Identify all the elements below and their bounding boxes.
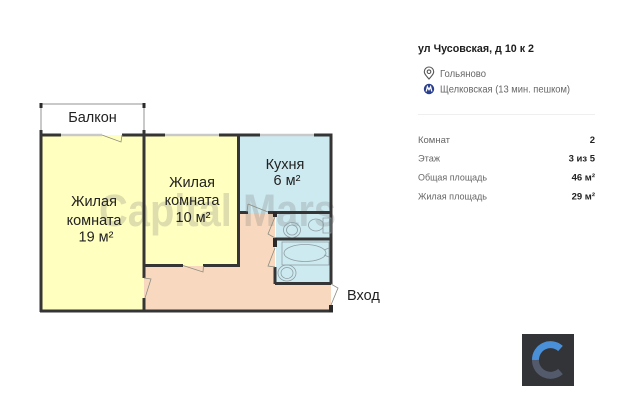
- logo: [522, 334, 574, 386]
- label: balcony: Балкон: [68, 110, 117, 126]
- label: kitchen: Кухня: [266, 157, 304, 173]
- label: entrance: Вход: [347, 288, 380, 304]
- windows: [61, 134, 314, 136]
- room: small living room: [144, 135, 239, 266]
- doors: [102, 135, 338, 305]
- district: Гольяново: [440, 69, 486, 80]
- stats table: 3 из 5: [569, 154, 596, 164]
- label: room 19: комната: [67, 213, 122, 229]
- room: large living room: [41, 135, 144, 310]
- icon: location pin: [424, 67, 434, 79]
- stats table: Жилая площадь: [418, 192, 487, 202]
- address heading: ул Чусовская, д 10 к 2: [418, 43, 534, 55]
- label: room 10: Жилая: [169, 175, 215, 191]
- watermark: Capital Mars: [99, 185, 336, 236]
- label: room 10: 10 м²: [176, 210, 211, 226]
- label: kitchen: 6 м²: [274, 173, 301, 189]
- stats table: 46 м²: [572, 172, 595, 184]
- stats table: Общая площадь: [418, 172, 487, 184]
- label: room 19: Жилая: [71, 194, 117, 210]
- stats table: 2: [590, 135, 595, 146]
- room: hallway: [144, 213, 331, 310]
- icon: metro: [424, 84, 434, 94]
- wall thick ends: [40, 103, 333, 312]
- metro station: Щелковская (13 мин. пешком): [440, 84, 570, 96]
- divider: [418, 114, 595, 115]
- balcony frame: [41, 104, 144, 134]
- stats table: 29 м²: [572, 192, 595, 202]
- room: kitchen: [239, 135, 331, 213]
- stats table: Комнат: [418, 135, 451, 146]
- label: room 19: 19 м²: [79, 230, 114, 246]
- room: bathroom and toilet: [276, 213, 331, 283]
- stats table: Этаж: [418, 154, 441, 164]
- label: room 10: комната: [165, 193, 220, 209]
- stats table: [418, 135, 596, 202]
- walls: [40, 104, 333, 312]
- fixtures: toilet room sink and toilet: [278, 218, 331, 281]
- floor plan: [40, 103, 380, 312]
